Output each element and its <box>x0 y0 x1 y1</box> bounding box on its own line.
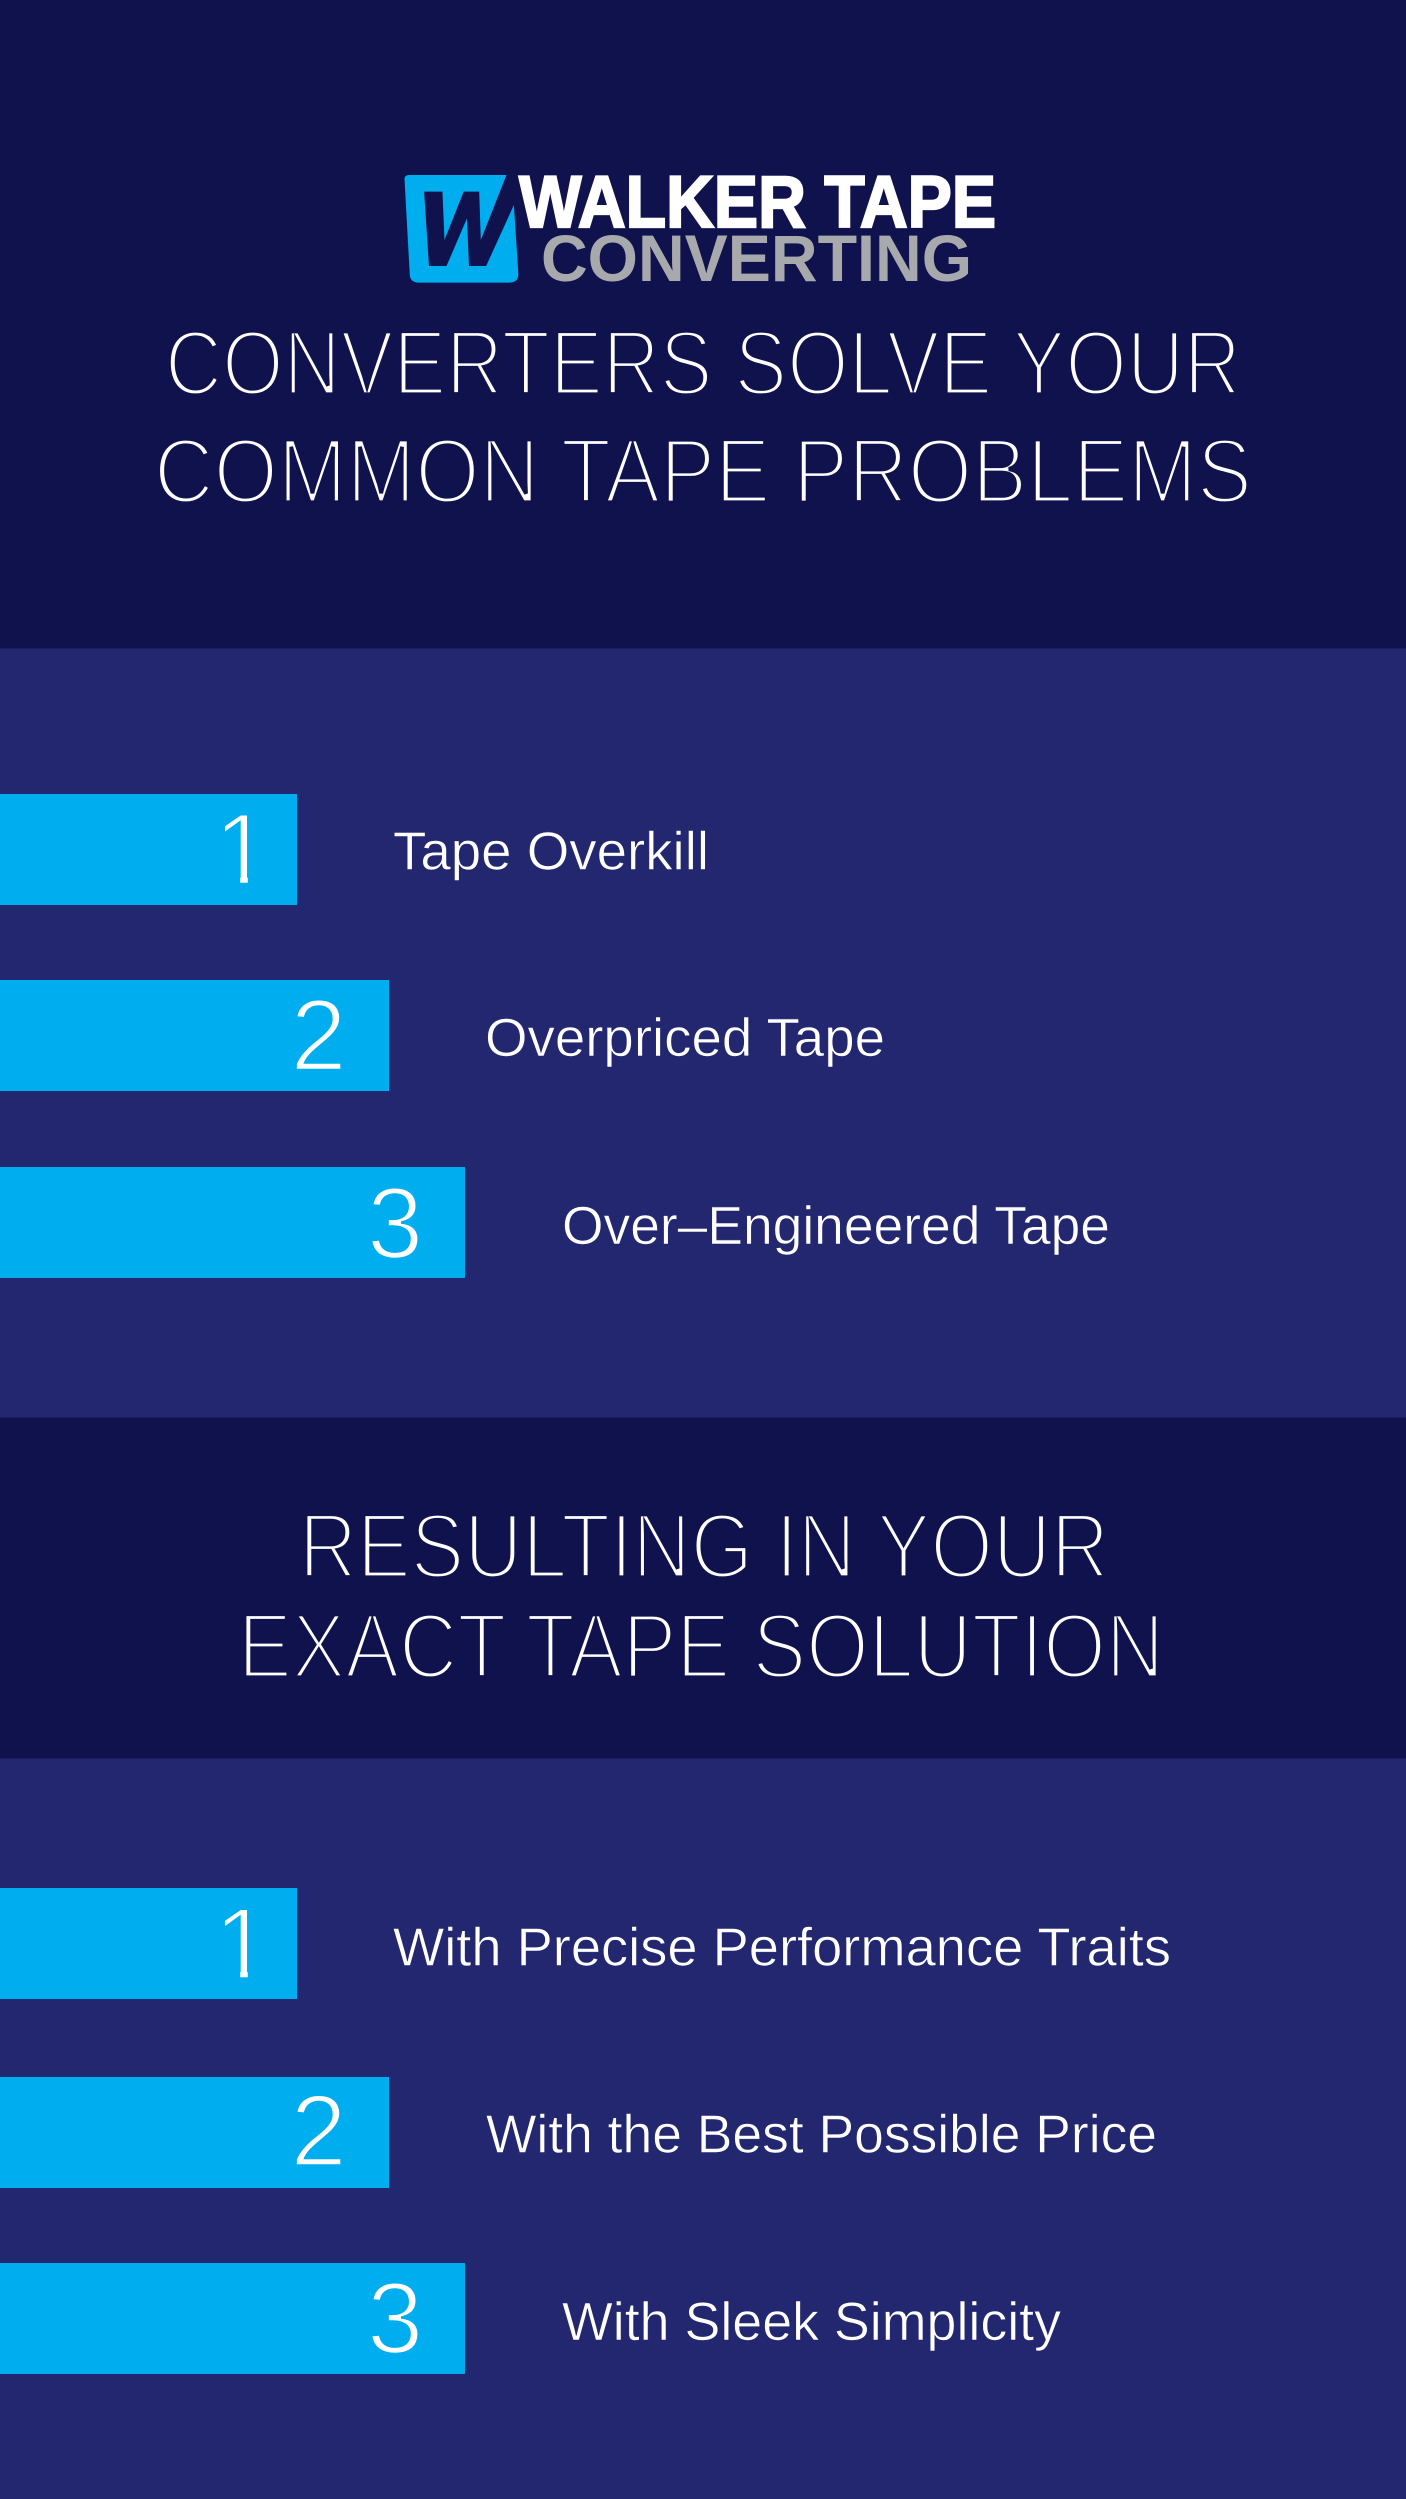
row 2: overpriced tape: 2 <box>290 980 347 1092</box>
row 2: best possible price <box>0 2076 1157 2188</box>
row 1: tape overkill: 1 <box>214 794 270 906</box>
heading: converters solve your common tape problems <box>154 313 1252 523</box>
row 2: overpriced tape: Overpriced Tape <box>485 1009 885 1068</box>
panel: header <box>0 0 1406 648</box>
heading: resulting in your exact tape solution: RESULTING IN YOUR <box>299 1496 1109 1598</box>
icon: W badge <box>404 175 523 283</box>
panel: tape problems <box>0 648 1406 1418</box>
heading: converters solve your common tape problems: COMMON TAPE PROBLEMS <box>154 421 1252 523</box>
heading: converters solve your common tape problems: CONVERTERS SOLVE YOUR <box>165 313 1241 415</box>
row 1: precise performance traits <box>0 1888 1171 2000</box>
row 3: over-engineered tape <box>0 1167 1110 1280</box>
row 2: best possible price: With the Best Possible Price <box>486 2106 1157 2164</box>
logo: Walker Tape Converting <box>404 162 996 295</box>
logo text: Walker Tape: WALKER TAPE <box>519 162 996 243</box>
logo text: Converting: CONVERTING <box>541 221 972 295</box>
row 1: tape overkill: Tape Overkill <box>393 822 709 882</box>
panel: resulting in your exact tape solution <box>0 1418 1406 1758</box>
row 2: overpriced tape <box>0 980 885 1092</box>
row 3: sleek simplicity <box>0 2263 1061 2375</box>
row 1: precise performance traits: 1 <box>214 1888 270 2000</box>
row 3: sleek simplicity: 3 <box>367 2263 423 2375</box>
row 3: over-engineered tape: 3 <box>367 1168 423 1280</box>
panel: tape solutions <box>0 1758 1406 2499</box>
heading: resulting in your exact tape solution: EXACT TAPE SOLUTION <box>238 1595 1164 1697</box>
heading: resulting in your exact tape solution <box>238 1496 1164 1697</box>
row 1: precise performance traits: With Precise Performance Traits <box>393 1918 1171 1978</box>
row 2: best possible price: 2 <box>290 2076 347 2188</box>
row 3: over-engineered tape: Over–Engineered Tape <box>562 1197 1110 1256</box>
row 1: tape overkill <box>0 794 709 906</box>
row 3: sleek simplicity: With Sleek Simplicity <box>562 2293 1061 2352</box>
